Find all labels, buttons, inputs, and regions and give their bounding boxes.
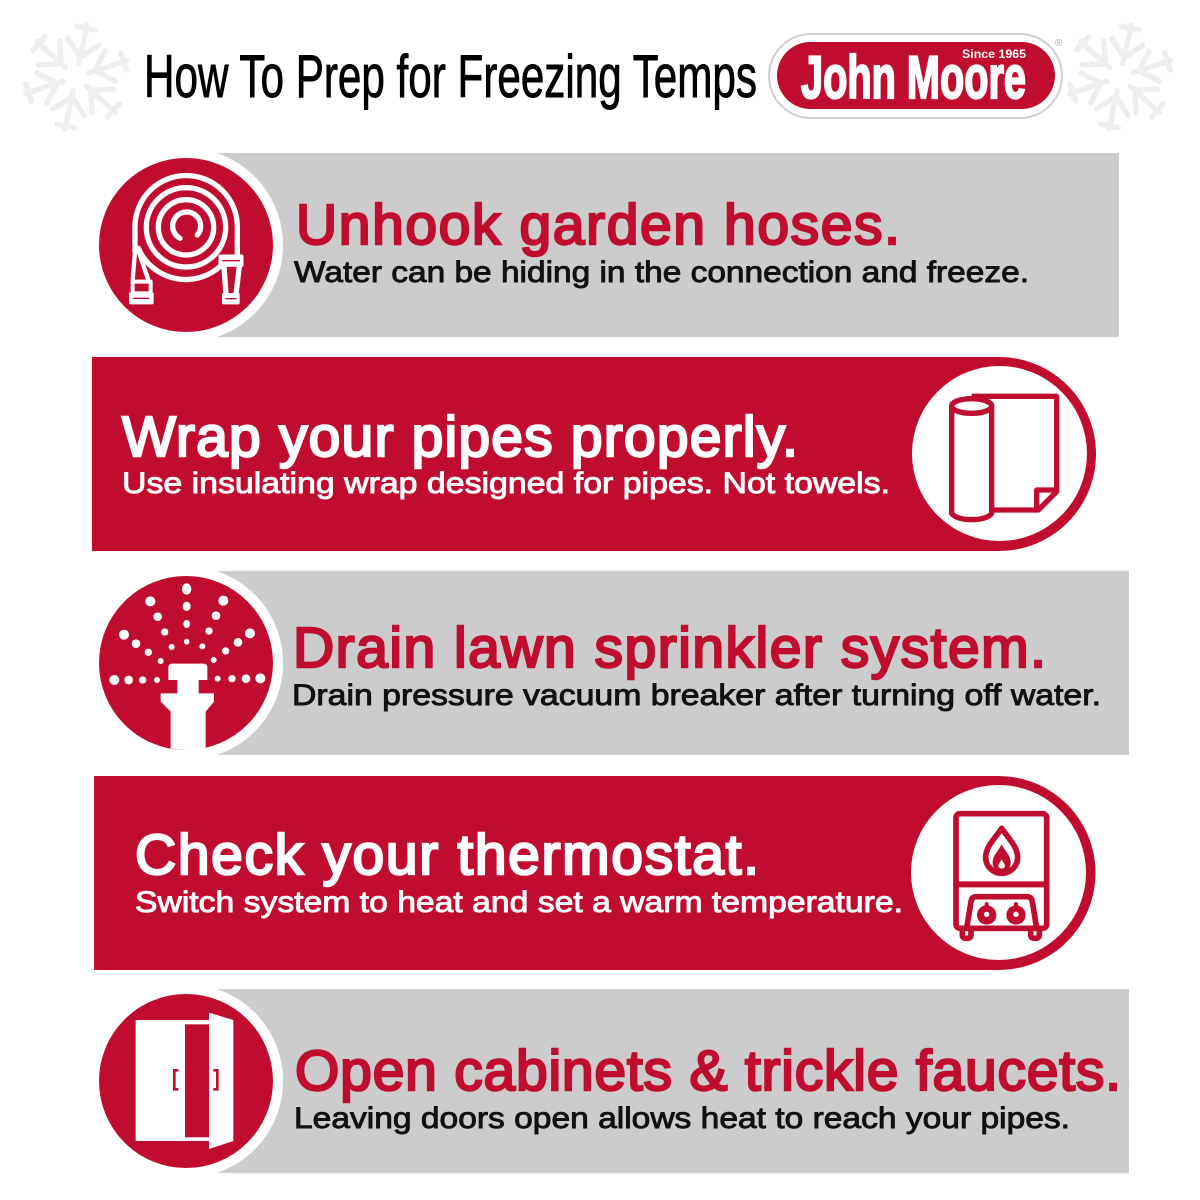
icon: sprinkler [109,583,265,750]
icon: garden hose [131,175,242,303]
heading: drain sprinkler: Drain lawn sprinkler system. [293,616,1046,680]
panel: check thermostat [94,776,1096,970]
panel: wrap your pipes [92,357,1096,551]
logo: John Moore: John Moore [801,44,1026,111]
text: wrap description: Use insulating wrap designed for pipes. Not towels. [122,467,890,500]
heading: wrap your pipes: Wrap your pipes properly. [122,405,798,469]
heading: check thermostat: Check your thermostat. [135,823,759,887]
logo: John Moore [769,34,1063,118]
logo: John Moore: Since 1965 [962,49,1027,61]
text: cabinets description: Leaving doors open allows heat to reach your pipes. [294,1102,1070,1135]
text: thermostat description: Switch system to heat and set a warm temperature. [135,886,903,919]
icon: insulation roll [952,396,1057,520]
text: drain description: Drain pressure vacuum breaker after turning off water. [292,679,1101,712]
heading: unhook garden hoses: Unhook garden hoses. [296,193,900,257]
icon: heater [956,814,1047,938]
panel: open cabinets [89,984,1129,1178]
logo: John Moore: ® [1055,38,1063,49]
text: unhook description: Water can be hiding in the connection and freeze. [294,256,1029,289]
icon: cabinet doors [136,1013,233,1149]
title: How To Prep for Freezing Temps [144,43,757,110]
icon: left snowflake [12,14,140,140]
panel: unhook garden hoses [89,148,1119,342]
icon: right snowflake [1056,14,1184,140]
heading: open cabinets: Open cabinets & trickle faucets. [295,1039,1121,1103]
panel: drain lawn sprinkler [89,566,1129,760]
